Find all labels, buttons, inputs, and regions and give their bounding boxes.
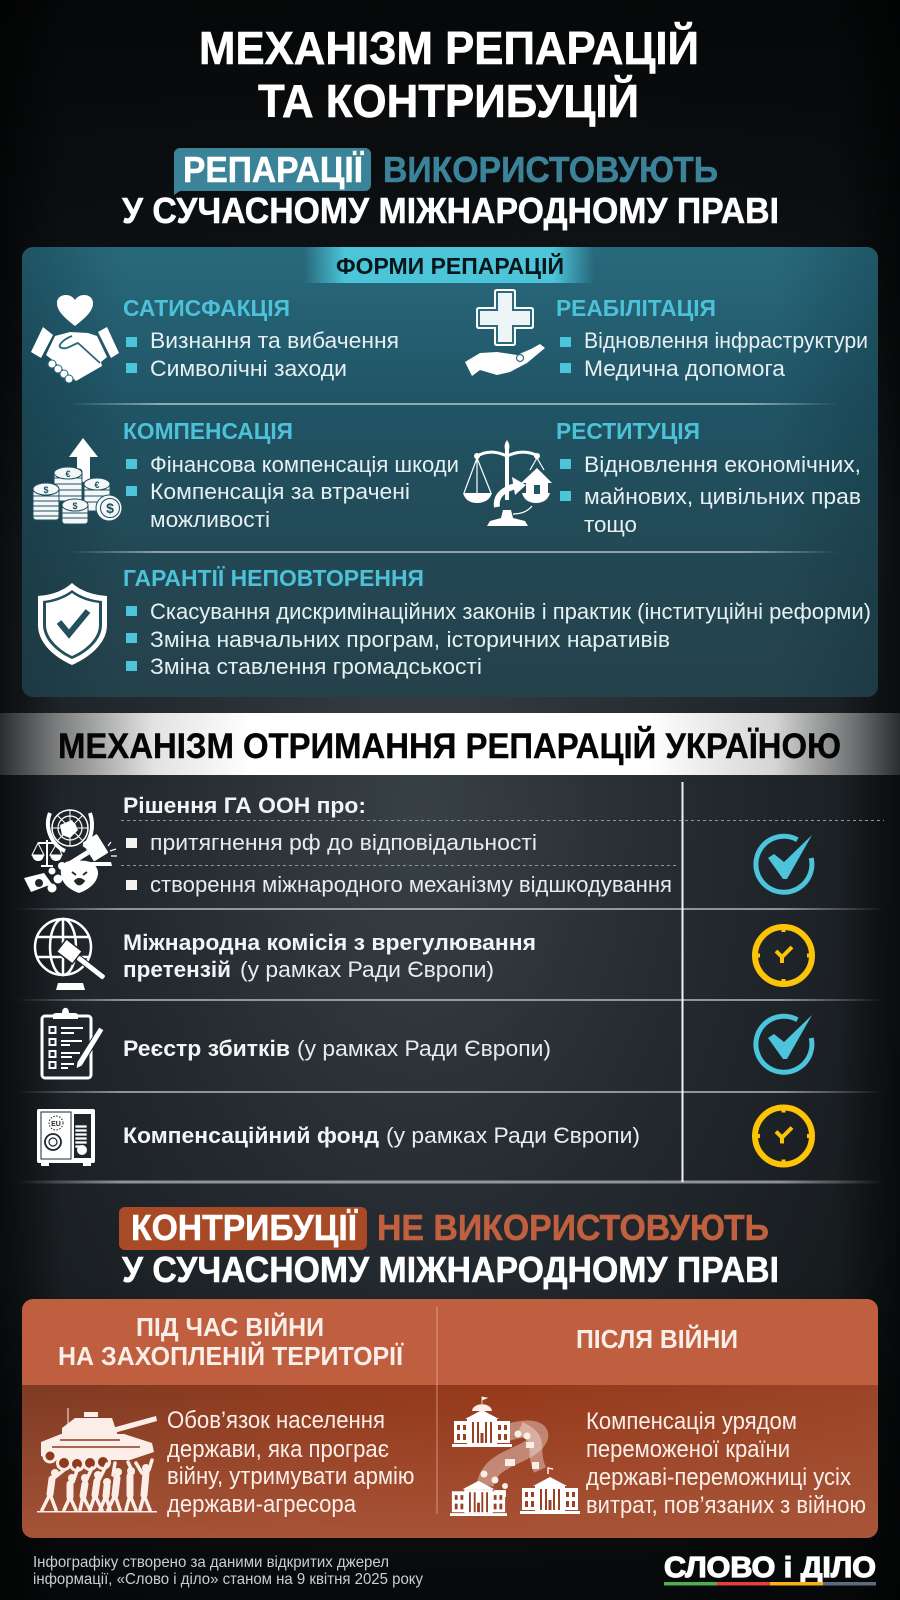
status: done xyxy=(756,835,812,892)
block: restitution: майнових, цивільних прав xyxy=(584,484,861,509)
icon: coin stacks and arrow: € xyxy=(94,480,100,490)
heading: contributions are not used: КОНТРИБУЦІЇ xyxy=(131,1207,358,1248)
text: during the war description: Обов’язок населення xyxy=(167,1407,385,1434)
row: international claims commission: претензій xyxy=(123,957,231,982)
row: UN General Assembly decision: притягнення рф до відповідальності xyxy=(150,830,537,855)
row: register of damage xyxy=(123,1036,551,1061)
heading: reparations are used: РЕПАРАЦІЇ xyxy=(183,149,364,190)
heading: reparations are used: У СУЧАСНОМУ МІЖНАРОДНОМУ ПРАВІ xyxy=(122,190,779,231)
icon: safe with coins: EU xyxy=(51,1121,61,1128)
row: international claims commission: (у рамках Ради Європи) xyxy=(240,957,494,982)
heading: reparations are used: ВИКОРИСТОВУЮТЬ xyxy=(383,149,718,190)
icon: coin stacks and arrow: $ xyxy=(43,485,49,495)
panel: contributions comparison xyxy=(22,1299,878,1538)
text: after the war description: переможеної країни xyxy=(586,1436,790,1463)
block: rehabilitation: Медична допомога xyxy=(584,356,785,381)
text: during the war description: держави-агресора xyxy=(167,1491,357,1518)
row: compensation fund: (у рамках Ради Європи) xyxy=(386,1123,640,1148)
text: during the war description xyxy=(167,1407,414,1518)
block: rehabilitation: РЕАБІЛІТАЦІЯ xyxy=(556,295,716,321)
icon: coin stacks and arrow: $ xyxy=(72,501,78,511)
status: pending xyxy=(755,1108,812,1164)
block: rehabilitation: Відновлення інфраструктури xyxy=(584,328,868,353)
row: compensation fund xyxy=(123,1123,640,1148)
row: international claims commission xyxy=(123,930,536,982)
source note: інформації, «Слово і діло» станом на 9 квітня 2025 року xyxy=(33,1571,423,1588)
row: UN General Assembly decision: створення міжнародного механізму відшкодування xyxy=(150,872,672,897)
text: after the war description: витрат, пов’язаних з війною xyxy=(586,1492,866,1519)
block: rehabilitation xyxy=(556,295,868,381)
panel header: ФОРМИ РЕПАРАЦІЙ xyxy=(336,252,564,279)
icon: scales with house xyxy=(463,440,552,526)
block: guarantees of non-recurrence xyxy=(123,565,871,679)
icon: safe with coins xyxy=(37,1109,95,1166)
heading: reparations are used xyxy=(122,148,779,231)
row: register of damage: Реєстр збитків xyxy=(123,1036,290,1061)
row: register of damage: (у рамках Ради Європи) xyxy=(297,1036,551,1061)
block: guarantees of non-recurrence: Зміна ставлення громадськості xyxy=(150,654,482,679)
column header: during the war xyxy=(58,1312,404,1371)
text: during the war description: держави, яка програє xyxy=(167,1436,389,1463)
panel header xyxy=(304,247,594,283)
icon: money flowing between government buildings xyxy=(450,1397,580,1516)
heading: contributions are not used: У СУЧАСНОМУ МІЖНАРОДНОМУ ПРАВІ xyxy=(122,1249,779,1290)
block: restitution: тощо xyxy=(584,512,637,537)
icon: tank carried by people xyxy=(37,1408,157,1512)
icon: heart and handshake xyxy=(31,295,119,383)
column header: during the war: ПІД ЧАС ВІЙНИ xyxy=(136,1312,324,1342)
panel: forms of reparations xyxy=(22,247,878,697)
block: restitution xyxy=(556,418,861,537)
row: compensation fund: Компенсаційний фонд xyxy=(123,1123,379,1148)
status: done xyxy=(756,1015,812,1072)
table: mechanism steps xyxy=(17,782,884,1184)
section band: mechanism heading xyxy=(0,713,900,775)
block: guarantees of non-recurrence: Скасування дискримінаційних законів і практик (інституційні реформи) xyxy=(150,599,871,624)
text: after the war description: державі-переможниці усіх xyxy=(586,1464,851,1491)
block: compensation xyxy=(123,418,459,532)
block: compensation: КОМПЕНСАЦІЯ xyxy=(123,418,293,444)
column header: after the war: ПІСЛЯ ВІЙНИ xyxy=(576,1324,738,1354)
block: restitution: Відновлення економічних, xyxy=(584,452,861,477)
block: compensation: Фінансова компенсація шкоди xyxy=(150,452,459,477)
text: after the war description: Компенсація урядом xyxy=(586,1408,797,1435)
title xyxy=(199,22,699,127)
icon: clipboard checklist xyxy=(42,1008,104,1078)
icon: UN emblem, gavel, bear xyxy=(24,810,117,893)
icon: globe and gavel xyxy=(35,919,109,990)
row: UN General Assembly decision: Рішення ГА ООН про: xyxy=(123,793,366,818)
block: satisfaction xyxy=(123,295,399,381)
block: satisfaction: САТИСФАКЦІЯ xyxy=(123,295,290,321)
icon: coin stacks and arrow: € xyxy=(65,469,71,479)
icon: medical cross and hand xyxy=(465,290,545,376)
text: after the war description xyxy=(586,1408,866,1519)
icon: coin stacks and arrow: $ xyxy=(106,500,114,516)
block: restitution: РЕСТИТУЦІЯ xyxy=(556,418,700,444)
text: during the war description: війну, утримувати армію xyxy=(167,1463,414,1490)
block: compensation: Компенсація за втрачені xyxy=(150,479,410,504)
status: pending xyxy=(755,927,812,984)
block: satisfaction: Визнання та вибачення xyxy=(150,328,399,353)
title: ТА КОНТРИБУЦІЙ xyxy=(258,75,639,127)
block: guarantees of non-recurrence: ГАРАНТІЇ НЕПОВТОРЕННЯ xyxy=(123,565,424,591)
icon: shield with check xyxy=(38,583,107,665)
source note xyxy=(33,1554,423,1588)
column header: during the war: НА ЗАХОПЛЕНІЙ ТЕРИТОРІЇ xyxy=(58,1341,404,1371)
source note: Інфографіку створено за даними відкритих джерел xyxy=(33,1554,389,1571)
row: UN General Assembly decision xyxy=(123,793,672,897)
label pill: contributions xyxy=(119,1207,367,1250)
heading: contributions are not used: НЕ ВИКОРИСТОВУЮТЬ xyxy=(377,1207,769,1248)
section band: mechanism heading: МЕХАНІЗМ ОТРИМАННЯ РЕПАРАЦІЙ УКРАЇНОЮ xyxy=(58,726,841,766)
block: compensation: можливості xyxy=(150,507,270,532)
logo: Slovo i Dilo: СЛОВО і ДІЛО xyxy=(664,1552,876,1584)
title: МЕХАНІЗМ РЕПАРАЦІЙ xyxy=(199,22,699,74)
block: guarantees of non-recurrence: Зміна навчальних програм, історичних наративів xyxy=(150,627,670,652)
icon: coin stacks and arrow xyxy=(33,438,122,524)
label pill: reparations xyxy=(174,148,371,195)
row: international claims commission: Міжнародна комісія з врегулювання xyxy=(123,930,536,955)
block: satisfaction: Символічні заходи xyxy=(150,356,347,381)
heading: contributions are not used xyxy=(119,1207,779,1290)
